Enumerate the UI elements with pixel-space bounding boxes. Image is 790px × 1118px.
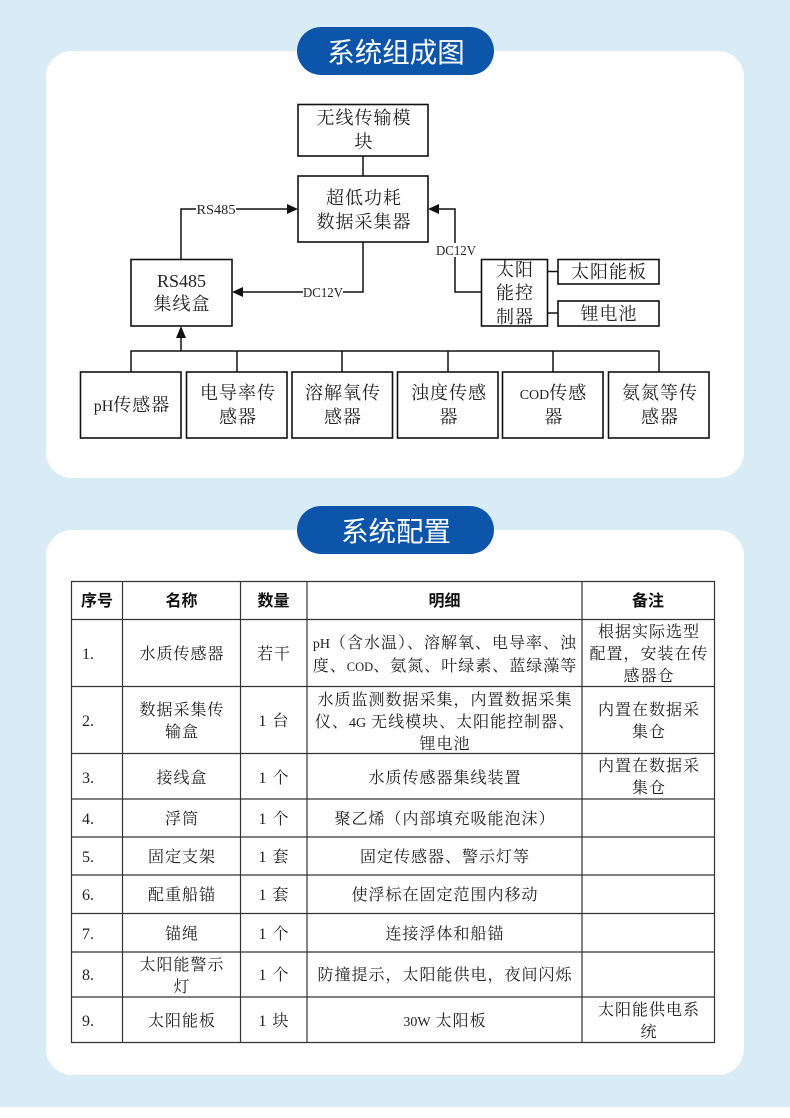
table header row: 名称 <box>165 592 198 610</box>
row 2: 锂电池 <box>419 735 471 753</box>
row 7 <box>82 925 505 943</box>
arrowheads <box>176 204 439 338</box>
box: solar panel <box>558 260 659 284</box>
box: COD sensor <box>502 372 603 438</box>
table header row: 明细 <box>428 592 461 610</box>
row 9: 太阳能供电系 <box>598 1001 700 1019</box>
label: RS485 link: RS485 <box>196 203 236 218</box>
box: dissolved oxygen sensor: 溶解氧传 <box>305 383 381 403</box>
box: dissolved oxygen sensor <box>292 372 392 438</box>
box: conductivity sensor: 电导率传 <box>200 383 276 403</box>
row 3: 3. <box>82 770 94 787</box>
box: data collector: 数据采集器 <box>316 212 412 232</box>
box: ammonia nitrogen sensor: 氨氮等传 <box>622 383 698 403</box>
row 2: 仪、4G 无线模块、太阳能控制器、 <box>315 712 575 731</box>
row 2: 1 台 <box>258 712 290 730</box>
row 4: 聚乙烯（内部填充吸能泡沫） <box>334 809 556 828</box>
box: pH sensor: pH传感器 <box>94 395 170 415</box>
row 2: 内置在数据采 <box>598 701 700 719</box>
row 1: 水质传感器 <box>139 645 225 663</box>
row 2 <box>82 690 700 753</box>
row 7: 7. <box>82 926 94 943</box>
label: DC12V from solar controller: DC12V <box>436 244 476 259</box>
box: wireless module: 无线传输模 <box>316 108 412 128</box>
box: wireless module <box>298 104 428 156</box>
connector lines <box>131 156 659 372</box>
box: pH sensor <box>80 372 181 438</box>
box: turbidity sensor <box>398 372 498 438</box>
row 8: 防撞提示，太阳能供电，夜间闪烁 <box>317 965 573 984</box>
row 2: 输盒 <box>165 723 199 741</box>
row 1: 感器仓 <box>623 667 675 685</box>
row 1 <box>82 623 709 685</box>
box: conductivity sensor: 感器 <box>219 407 257 427</box>
table header row: 备注 <box>632 591 664 610</box>
row 9 <box>82 1001 700 1041</box>
row 2: 水质监测数据采集，内置数据采集 <box>317 690 573 709</box>
panel: system configuration table <box>46 530 744 1075</box>
row 3: 水质传感器集线装置 <box>368 769 522 787</box>
row 1: 根据实际选型 <box>598 623 700 641</box>
row 3 <box>82 757 700 797</box>
row 4: 1 个 <box>258 810 290 828</box>
row 9: 太阳能板 <box>148 1012 216 1030</box>
box: RS485 hub: 集线盒 <box>154 294 210 314</box>
row 5: 1 套 <box>258 848 290 866</box>
table grid <box>72 582 714 1042</box>
row 3: 1 个 <box>258 769 290 787</box>
row 1: 若干 <box>257 645 291 663</box>
panel: system composition diagram <box>46 51 744 478</box>
row 2: 数据采集传 <box>139 701 225 719</box>
row 3: 内置在数据采 <box>598 757 700 775</box>
row 9: 统 <box>640 1023 658 1041</box>
box: solar controller <box>482 260 548 327</box>
table header row <box>81 591 664 610</box>
box: data collector <box>298 176 428 242</box>
box: wireless module: 块 <box>354 132 374 152</box>
box: solar panel: 太阳能板 <box>571 262 647 282</box>
row 7: 1 个 <box>258 925 290 943</box>
row 3: 接线盒 <box>156 769 208 787</box>
box: turbidity sensor: 器 <box>440 407 458 427</box>
row 1: 度、COD、氨氮、叶绿素、蓝绿藻等 <box>313 656 577 675</box>
box: COD sensor: COD传感 <box>520 383 587 403</box>
box: data collector: 超低功耗 <box>326 187 402 208</box>
box: RS485 hub <box>131 260 232 326</box>
row 7: 连接浮体和船锚 <box>385 925 505 943</box>
row 9: 1 块 <box>258 1012 290 1030</box>
row 6: 1 套 <box>258 886 290 904</box>
row 9: 9. <box>82 1013 94 1030</box>
box: lithium battery <box>558 301 659 326</box>
box: RS485 hub: RS485 <box>157 271 206 291</box>
box: ammonia nitrogen sensor: 感器 <box>641 407 679 427</box>
label: DC12V to hub: DC12V <box>303 286 343 301</box>
row 5 <box>82 848 530 866</box>
row 1: pH（含水温）、溶解氧、电导率、浊 <box>313 634 577 652</box>
row 6 <box>82 886 539 904</box>
row 7: 锚绳 <box>165 925 199 943</box>
row 5: 固定传感器、警示灯等 <box>360 848 530 866</box>
row 5: 固定支架 <box>148 848 216 866</box>
heading: system configuration <box>297 506 494 554</box>
row 6: 配重船锚 <box>148 886 216 904</box>
row 8: 灯 <box>173 978 191 996</box>
row 8: 太阳能警示 <box>139 956 225 974</box>
row 6: 6. <box>82 887 94 904</box>
box: turbidity sensor: 浊度传感 <box>411 383 487 403</box>
box: solar controller: 太阳 <box>496 260 534 280</box>
row 8: 1 个 <box>258 966 290 984</box>
row 4: 4. <box>82 811 94 828</box>
row 8 <box>82 956 573 996</box>
heading: system composition: 系统组成图 <box>327 37 465 68</box>
box: lithium battery: 锂电池 <box>580 304 638 324</box>
row 3: 集仓 <box>632 779 666 797</box>
row 4 <box>82 809 556 828</box>
row 8: 8. <box>82 967 94 984</box>
box: solar controller: 能控 <box>496 283 534 303</box>
box: conductivity sensor <box>186 372 287 438</box>
table header row: 数量 <box>257 592 290 610</box>
row 2: 集仓 <box>632 723 666 741</box>
heading: system configuration: 系统配置 <box>341 516 451 547</box>
row 1: 1. <box>82 646 94 663</box>
box: solar controller: 制器 <box>496 307 534 327</box>
heading: system composition <box>297 27 494 75</box>
box: ammonia nitrogen sensor <box>608 372 709 438</box>
row 9: 30W 太阳板 <box>403 1012 487 1030</box>
row 4: 浮筒 <box>165 810 199 828</box>
row 2: 2. <box>82 713 94 730</box>
row 6: 使浮标在固定范围内移动 <box>351 886 539 904</box>
row 1: 配置，安装在传 <box>589 645 709 663</box>
box: COD sensor: 器 <box>544 407 564 427</box>
table header row: 序号 <box>81 591 113 610</box>
box: dissolved oxygen sensor: 感器 <box>324 407 362 427</box>
row 5: 5. <box>82 849 94 866</box>
